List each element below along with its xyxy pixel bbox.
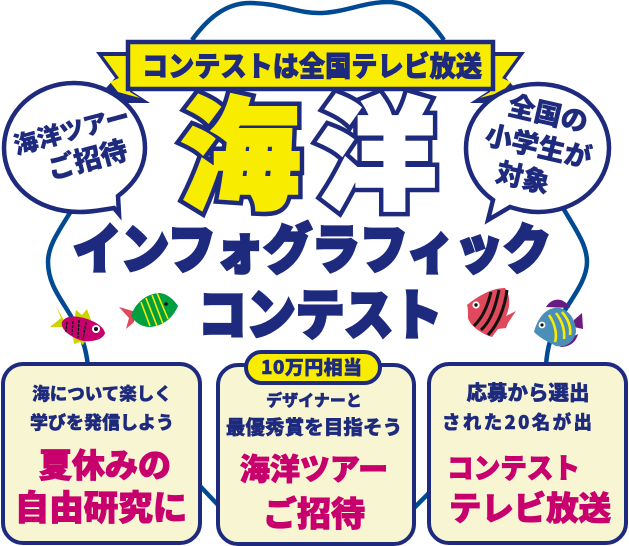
panel: top prize <box>218 352 414 544</box>
icon: green fish <box>119 293 178 329</box>
logo: 海洋: 海 <box>181 59 300 233</box>
prize pill <box>246 352 380 383</box>
speech bubble: elementary students nationwide <box>466 80 609 220</box>
icon: red striped fish <box>467 288 516 337</box>
panel: summer homework: 自由研究に <box>15 480 187 530</box>
logo: 海洋: 洋 <box>317 59 436 233</box>
ribbon banner <box>96 42 525 103</box>
panel: TV broadcast: された20名が出 <box>442 409 592 435</box>
panel: summer homework <box>3 364 200 543</box>
title line 1: インフォグラフィック <box>73 208 551 284</box>
icon: blue angelfish <box>534 300 583 347</box>
panel: summer homework: 夏休みの <box>39 439 171 487</box>
panel: top prize: ご招待 <box>263 487 365 536</box>
bubble text: 対象 <box>493 151 554 201</box>
icon: magenta fish <box>50 306 105 345</box>
logo: 海洋: 洋 <box>317 59 436 233</box>
logo: 海洋: 海 <box>181 59 300 233</box>
bubble text <box>474 80 603 209</box>
panel: TV broadcast: 応募から選出 <box>466 376 590 406</box>
panel: summer homework: 学びを発信しよう <box>30 409 174 435</box>
panel: TV broadcast <box>429 364 626 543</box>
bubble text <box>9 97 142 194</box>
logo: 海洋 <box>181 59 436 233</box>
speech bubble: tour invitation <box>4 83 145 214</box>
bubble text: 海洋ツアー <box>9 97 133 161</box>
bubble text: ご招待 <box>43 128 131 187</box>
panel: top prize: 最優秀賞を目指そう <box>226 411 402 440</box>
ribbon text: コンテストは全国テレビ放送 <box>142 45 482 85</box>
panel: top prize: デザイナーと <box>266 387 362 411</box>
panel: top prize: 海洋ツアー <box>240 445 388 489</box>
bubble text: 小学生が <box>482 113 596 176</box>
title line 2: コンテスト <box>198 271 442 350</box>
panel: TV broadcast: コンテスト <box>447 447 580 487</box>
wavy blue outline <box>48 2 587 508</box>
prize pill: 10万円相当 <box>261 353 362 380</box>
bubble text: 全国の <box>505 84 592 140</box>
panel: summer homework: 海について楽しく <box>32 381 172 406</box>
panel: TV broadcast: テレビ放送 <box>449 482 611 530</box>
